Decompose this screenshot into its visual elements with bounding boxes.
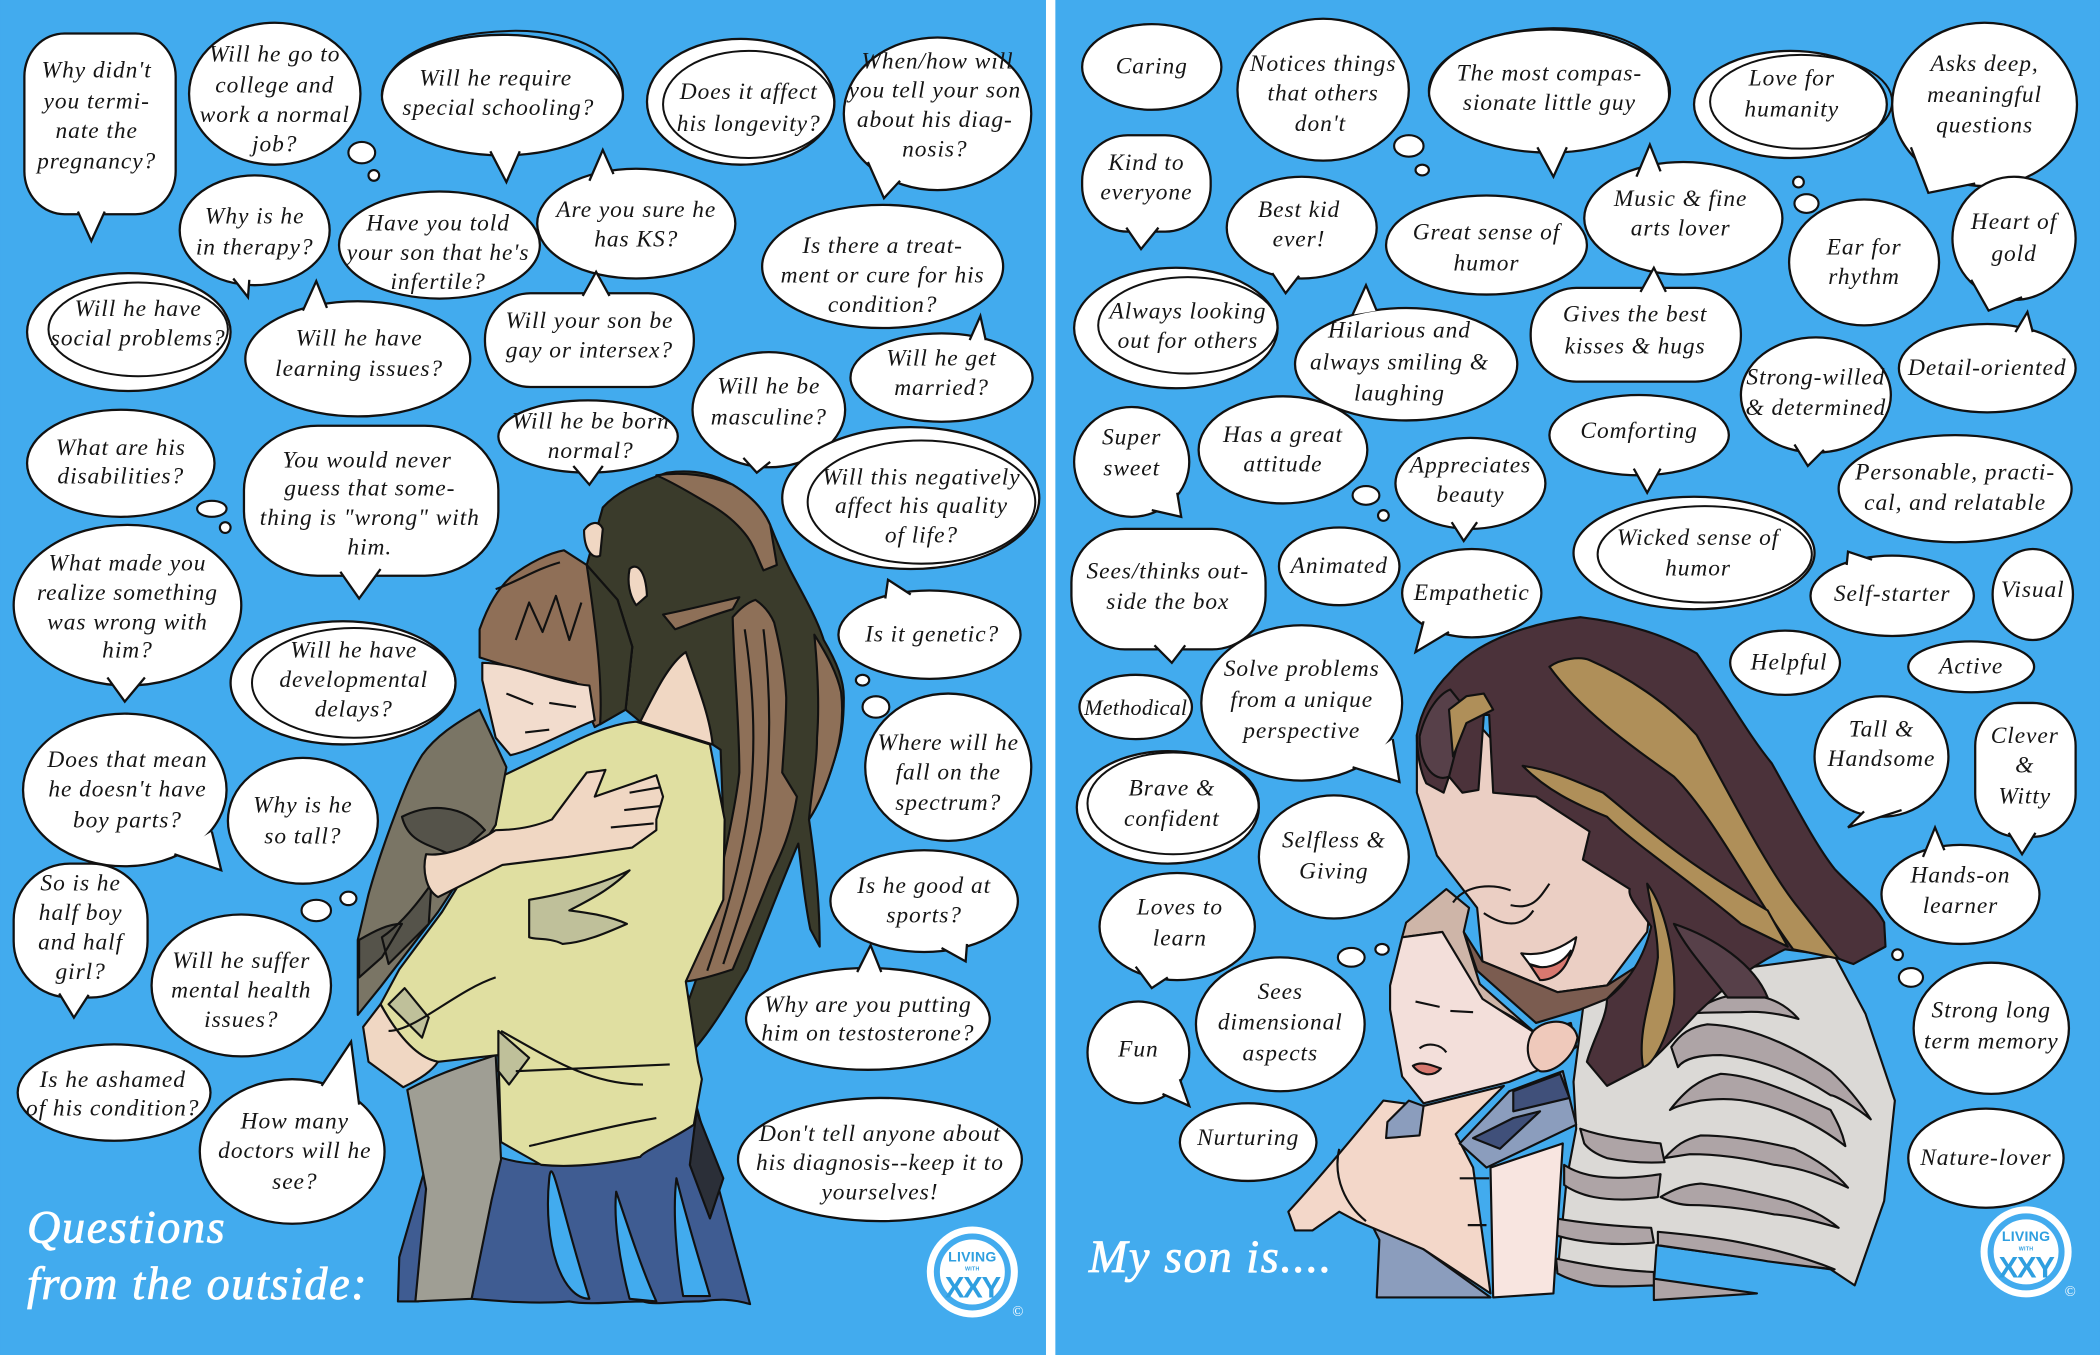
bubble: ashamed: Is he ashamed [39,1067,186,1093]
bubble: sense of humor: humor [1454,250,1519,276]
bubble: heart of gold: Heart of [1970,209,2060,235]
bubble: testosterone: him on testosterone? [761,1020,974,1046]
bubble: ashamed [18,1044,210,1141]
bubble: treatment or cure: condition? [828,292,937,318]
bubble: when will you tell [844,37,1031,198]
logo: living with xxy: XXY [1999,1251,2055,1284]
bubble: ear for rhythm: rhythm [1828,264,1900,290]
logo: living with xxy: LIVING [2002,1228,2050,1244]
bubble: college and job: work a normal [200,102,350,128]
bubble: so tall: Why is he [253,793,353,819]
bubble: is it genetic: Is it genetic? [864,621,999,647]
bubble: ashamed: of his condition? [26,1095,199,1121]
bubble: always looking out: out for others [1118,328,1258,354]
bubble: infertile: infertile? [390,269,486,295]
bubble: testosterone [746,945,990,1070]
bubble: nature-lover: Nature-lover [1919,1145,2052,1171]
bubble: wicked sense of humor: humor [1665,556,1731,582]
bubble: asks deep questions: meaningful [1927,82,2042,108]
bubble: compassionate [1429,28,1670,177]
bubble: learning issues [245,281,470,416]
bubble: music and fine arts: arts lover [1631,216,1731,242]
bubble: infertile: your son that he's [345,240,529,266]
bubble: is it genetic [838,580,1021,679]
bubble: wicked sense of humor [1574,497,1815,609]
bubble: best kisses and hugs: kisses & hugs [1565,333,1706,359]
bubble: nature-lover [1908,1109,2064,1208]
bubble: hilarious [1295,285,1517,420]
bubble: born normal: Will he be born [512,408,670,434]
bubble: notices things: don't [1295,111,1346,137]
bubble: sense of humor [1386,195,1587,295]
bubble: visual [1993,549,2073,640]
bubble: solve problems: perspective [1241,718,1360,744]
bubble: boy parts: boy parts? [73,807,182,833]
bubble: solve problems: from a unique [1230,687,1373,713]
bubble: brave and confident [1077,751,1259,864]
bubble: get married: Will he get [886,346,997,372]
bubble: never guess: him. [347,534,392,560]
thought dots [1353,486,1389,521]
bubble: good at sports: sports? [886,903,962,929]
bubble: mental health: issues? [204,1007,278,1033]
bubble: best kid ever [1227,177,1377,293]
bubble: what made you realize [14,525,241,702]
bubble: what made you realize: What made you [49,550,206,576]
logo: living with xxy: WITH [2019,1247,2033,1253]
bubble: get married: married? [894,375,989,401]
bubble: always looking out [1074,268,1278,388]
bubble: mental health: mental health [171,978,311,1004]
logo: living with xxy [927,1226,1018,1318]
bubble: appreciates beauty: Appreciates [1408,453,1531,479]
bubble: methodical: Methodical [1083,695,1187,720]
bubble: hands-on learner: Hands-on [1910,862,2010,888]
heading: questions from the outside [27,1202,368,1309]
bubble: loves to learn [1100,873,1255,988]
bubble: sees dimensional aspects: dimensional [1218,1010,1343,1036]
bubble: best kisses and hugs [1531,268,1741,382]
bubble: hilarious: Hilarious and [1327,317,1471,343]
bubble: hilarious: always smiling & [1310,350,1489,376]
bubble: brave and confident: Brave & [1129,775,1215,801]
bubble: college and job [189,23,360,165]
bubble: boy parts [23,714,227,870]
bubble: so tall [228,758,378,884]
bubble: special schooling [382,31,623,182]
bubble: sees thinks outside the box: side the box [1106,589,1229,615]
bubble: why didn't you terminate [24,33,176,241]
bubble: boy parts: he doesn't have [48,777,207,803]
bubble: what made you realize: was wrong with [47,609,208,635]
bubble: asks deep questions: Asks deep, [1928,51,2039,77]
bubble: solve problems: Solve problems [1224,656,1380,682]
bubble: selfless and giving [1259,795,1409,919]
bubble: get married [850,316,1033,422]
bubble: how many doctors [200,1042,385,1224]
bubble: sees dimensional aspects: Sees [1258,979,1303,1005]
bubble: disabilities [27,410,215,517]
bubble: loves to learn: Loves to [1136,894,1223,920]
heading: questions from the outside: from the outside: [27,1258,368,1309]
bubble: great attitude: Has a great [1222,422,1343,448]
bubble: sees dimensional aspects [1196,957,1365,1091]
bubble: developmental delays: developmental [279,667,428,693]
bubble: hands-on learner [1881,827,2039,944]
bubble: when will you tell: about his diag- [857,107,1013,133]
bubble: compassionate: sionate little guy [1463,90,1636,116]
bubble: hilarious: laughing [1354,380,1445,406]
bubble: visual: Visual [2001,577,2065,603]
bubble: gay or intersex: gay or intersex? [506,337,673,363]
bubble: why didn't you terminate: Why didn't [42,58,152,84]
bubble: empathetic [1402,549,1541,652]
bubble: self-starter: Self-starter [1834,581,1951,607]
bubble: developmental delays [231,621,456,744]
bubble: clever and witty [1975,703,2076,854]
bubble: ear for rhythm: Ear for [1826,234,1902,260]
bubble: tall and handsome [1815,696,1948,827]
bubble: personable: Personable, practi- [1854,459,2055,485]
bubble: great attitude: attitude [1243,451,1323,477]
bubble: best kisses and hugs: Gives the best [1563,301,1707,327]
bubble: quality of life [782,427,1039,569]
bubble: selfless and giving: Giving [1299,858,1369,884]
bubble: why didn't you terminate: nate the [56,118,138,144]
bubble: helpful [1730,631,1840,695]
heading: questions from the outside: Questions [27,1202,226,1253]
logo: living with xxy: WITH [965,1267,980,1273]
bubble: when will you tell: you tell your son [846,78,1021,104]
bubble: loves to learn: learn [1153,925,1207,951]
bubble: appreciates beauty: beauty [1436,482,1504,508]
bubble: wicked sense of humor: Wicked sense of [1617,525,1782,551]
bubble: active [1908,641,2034,692]
bubble: never guess: guess that some- [284,475,455,501]
bubble: college and job: job? [249,131,297,157]
bubble: social problems [27,273,231,391]
bubble: longevity [647,39,834,165]
bubble: when will you tell: When/how will [861,48,1014,74]
thought dots [856,675,889,718]
bubble: special schooling: special schooling? [402,95,594,121]
bubble: longevity: Does it affect [679,79,818,105]
bubble: therapy [180,175,330,297]
bubble: what made you realize: realize something [37,580,218,606]
bubble: longevity: his longevity? [677,111,821,137]
bubble: has KS: Are you sure he [554,197,716,223]
bubble: animated [1279,528,1399,605]
bubble: social problems: social problems? [51,325,226,351]
bubble: mental health: Will he suffer [172,948,310,974]
bubble: disabilities: disabilities? [57,463,184,489]
bubble: best kid ever: Best kid [1258,197,1340,223]
bubble: solve problems [1201,625,1402,782]
bubble: born normal [498,400,678,485]
bubble: so tall: so tall? [264,824,341,850]
bubble: great attitude [1199,396,1367,503]
bubble: selfless and giving: Selfless & [1282,828,1386,854]
bubble: animated: Animated [1289,553,1388,579]
bubble: nurturing: Nurturing [1196,1125,1299,1151]
bubble: music and fine arts [1584,145,1782,274]
illustration: mother and baby [1288,617,1895,1300]
bubble: sense of humor: Great sense of [1413,220,1563,246]
bubble: masculine: Will he be [717,374,820,400]
bubble: spectrum [865,694,1031,841]
bubble: gay or intersex: Will your son be [505,308,673,334]
bubble: strong-willed [1741,337,1891,466]
bubble: developmental delays: Will he have [290,637,417,663]
bubble: tall and handsome: Handsome [1827,746,1935,772]
bubble: never guess: You would never [282,447,452,473]
bubble: what made you realize: him? [102,637,153,663]
bubble: always looking out: Always looking [1107,299,1266,325]
bubble: infertile: Have you told [365,210,510,236]
bubble: don't tell anyone [738,1098,1022,1221]
bubble: active: Active [1937,653,2003,679]
bubble: good at sports: Is he good at [856,873,991,899]
bubble: has KS: has KS? [594,226,678,252]
bubble: quality of life: of life? [885,522,958,548]
bubble: sees dimensional aspects: aspects [1243,1040,1318,1066]
bubble: comforting: Comforting [1580,418,1698,444]
bubble: fun: Fun [1117,1036,1159,1062]
bubble: detail-oriented [1899,312,2076,412]
bubble: clever and witty: Clever [1991,723,2059,749]
logo: living with xxy: XXY [945,1271,1001,1304]
bubble: how many doctors: doctors will he [218,1138,371,1164]
bubble: super sweet: sweet [1103,455,1160,481]
bubble: why didn't you terminate: you termi- [42,88,150,114]
panel: my son is [1071,19,2077,1300]
bubble: social problems: Will he have [75,296,202,322]
bubble: infertile [339,191,540,299]
thought dots [197,501,231,533]
bubble: kind to everyone [1082,135,1211,249]
bubble: developmental delays: delays? [315,696,393,722]
bubble: gay or intersex [485,272,694,387]
bubble: empathetic: Empathetic [1413,580,1530,606]
bubble: half boy half girl: and half [38,929,126,955]
bubble: self-starter [1811,552,1974,636]
thought dots [1338,944,1389,967]
bubble: appreciates beauty [1395,438,1545,541]
bubble: love for humanity: humanity [1744,96,1839,122]
bubble: don't tell anyone: yourselves! [819,1180,938,1206]
bubble: college and job: Will he go to [209,42,340,68]
thought dots [1793,177,1819,213]
bubble: strong long term memory: Strong long [1932,998,2051,1024]
bubble: super sweet [1074,407,1189,517]
bubble: treatment or cure: ment or cure for his [781,263,985,289]
bubble: helpful: Helpful [1750,649,1828,675]
bubble: notices things [1237,19,1409,161]
bubble: therapy: Why is he [205,204,304,230]
bubble: special schooling: Will he require [419,66,572,92]
bubble: college and job: college and [215,72,334,98]
bubble: good at sports [830,850,1018,961]
thought dots [1892,949,1923,987]
bubble: born normal: normal? [548,438,634,464]
logo: living with xxy: LIVING [948,1248,997,1264]
thought dots [348,142,379,181]
bubble: half boy half girl [14,864,148,1018]
illustration: mother holding son from behind [358,471,844,1304]
bubble: testosterone: Why are you putting [764,992,972,1018]
thought dots [302,892,356,921]
copyright mark: © [1012,1304,1023,1320]
thought dots [1394,135,1429,175]
bubble: fun [1087,1002,1189,1106]
bubble: spectrum: spectrum? [895,790,1001,816]
bubble: personable: cal, and relatable [1864,490,2046,516]
bubble: has KS [537,150,735,278]
bubble: comforting [1549,395,1729,493]
bubble: masculine: masculine? [711,404,827,430]
bubble: masculine [693,352,845,473]
bubble: don't tell anyone: his diagnosis--keep it to [756,1150,1004,1176]
bubble: caring: Caring [1116,54,1188,80]
bubble: love for humanity: Love for [1748,66,1835,92]
bubble: learning issues: Will he have [296,325,423,351]
bubble: spectrum: Where will he [878,730,1019,756]
copyright mark: © [2065,1284,2076,1300]
bubble: treatment or cure [762,205,1003,328]
bubble: learning issues: learning issues? [275,356,443,382]
bubble: why didn't you terminate: pregnancy? [35,149,156,175]
bubble: half boy half girl: So is he [40,870,121,896]
bubble: love for humanity [1694,51,1892,158]
bubble: sees thinks outside the box [1071,529,1266,663]
bubble: treatment or cure: Is there a treat- [801,233,963,259]
bubble: tall and handsome: Tall & [1849,716,1914,742]
bubble: half boy half girl: half boy [39,900,122,926]
bubble: kind to everyone: everyone [1100,180,1192,206]
bubble: notices things: that others [1268,80,1379,106]
bubble: brave and confident: confident [1124,806,1220,832]
bubble: asks deep questions [1892,23,2077,193]
bubble: quality of life: Will this negatively [822,465,1021,491]
bubble: best kid ever: ever! [1273,226,1325,252]
bubble: when will you tell: nosis? [902,137,968,163]
bubble: never guess: thing is "wrong" with [260,505,480,531]
bubble: personable [1839,435,2072,542]
bubble: asks deep questions: questions [1936,113,2033,139]
bubble: music and fine arts: Music & fine [1613,186,1747,212]
panel: questions from the outside [14,23,1039,1320]
bubble: how many doctors: How many [240,1109,349,1135]
bubble: clever and witty: Witty [1998,783,2051,809]
bubble: quality of life: affect his quality [835,493,1008,519]
bubble: heart of gold: gold [1991,241,2037,267]
bubble: clever and witty: & [2015,753,2034,779]
bubble: don't tell anyone: Don't tell anyone about [758,1121,1001,1147]
bubble: half boy half girl: girl? [55,959,106,985]
bubble: kind to everyone: Kind to [1107,150,1184,176]
bubble: never guess [244,426,498,599]
heading: my son is: My son is.... [1088,1231,1333,1282]
bubble: super sweet: Super [1102,425,1161,451]
bubble: spectrum: fall on the [896,759,1001,785]
bubble: caring [1082,24,1221,110]
bubble: strong long term memory [1914,963,2069,1094]
bubble: therapy: in therapy? [196,234,314,260]
bubble: sees thinks outside the box: Sees/thinks out- [1086,558,1249,584]
bubble: heart of gold [1952,177,2076,311]
bubble: strong-willed: & determined [1746,395,1886,421]
bubble: detail-oriented: Detail-oriented [1907,355,2066,381]
bubble: strong long term memory: term memory [1924,1028,2059,1054]
bubble: ear for rhythm [1789,200,1939,325]
bubble: methodical [1079,675,1192,739]
bubble: boy parts: Does that mean [46,747,208,773]
bubble: compassionate: The most compas- [1457,60,1642,86]
bubble: disabilities: What are his [56,435,186,461]
bubble: mental health [152,914,331,1056]
bubble: nurturing [1180,1103,1316,1181]
bubble: strong-willed: Strong-willed [1746,364,1885,390]
bubble: notices things: Notices things [1249,51,1396,77]
bubble: hands-on learner: learner [1923,893,1998,919]
logo: living with xxy [1981,1206,2072,1297]
bubble: how many doctors: see? [272,1169,318,1195]
